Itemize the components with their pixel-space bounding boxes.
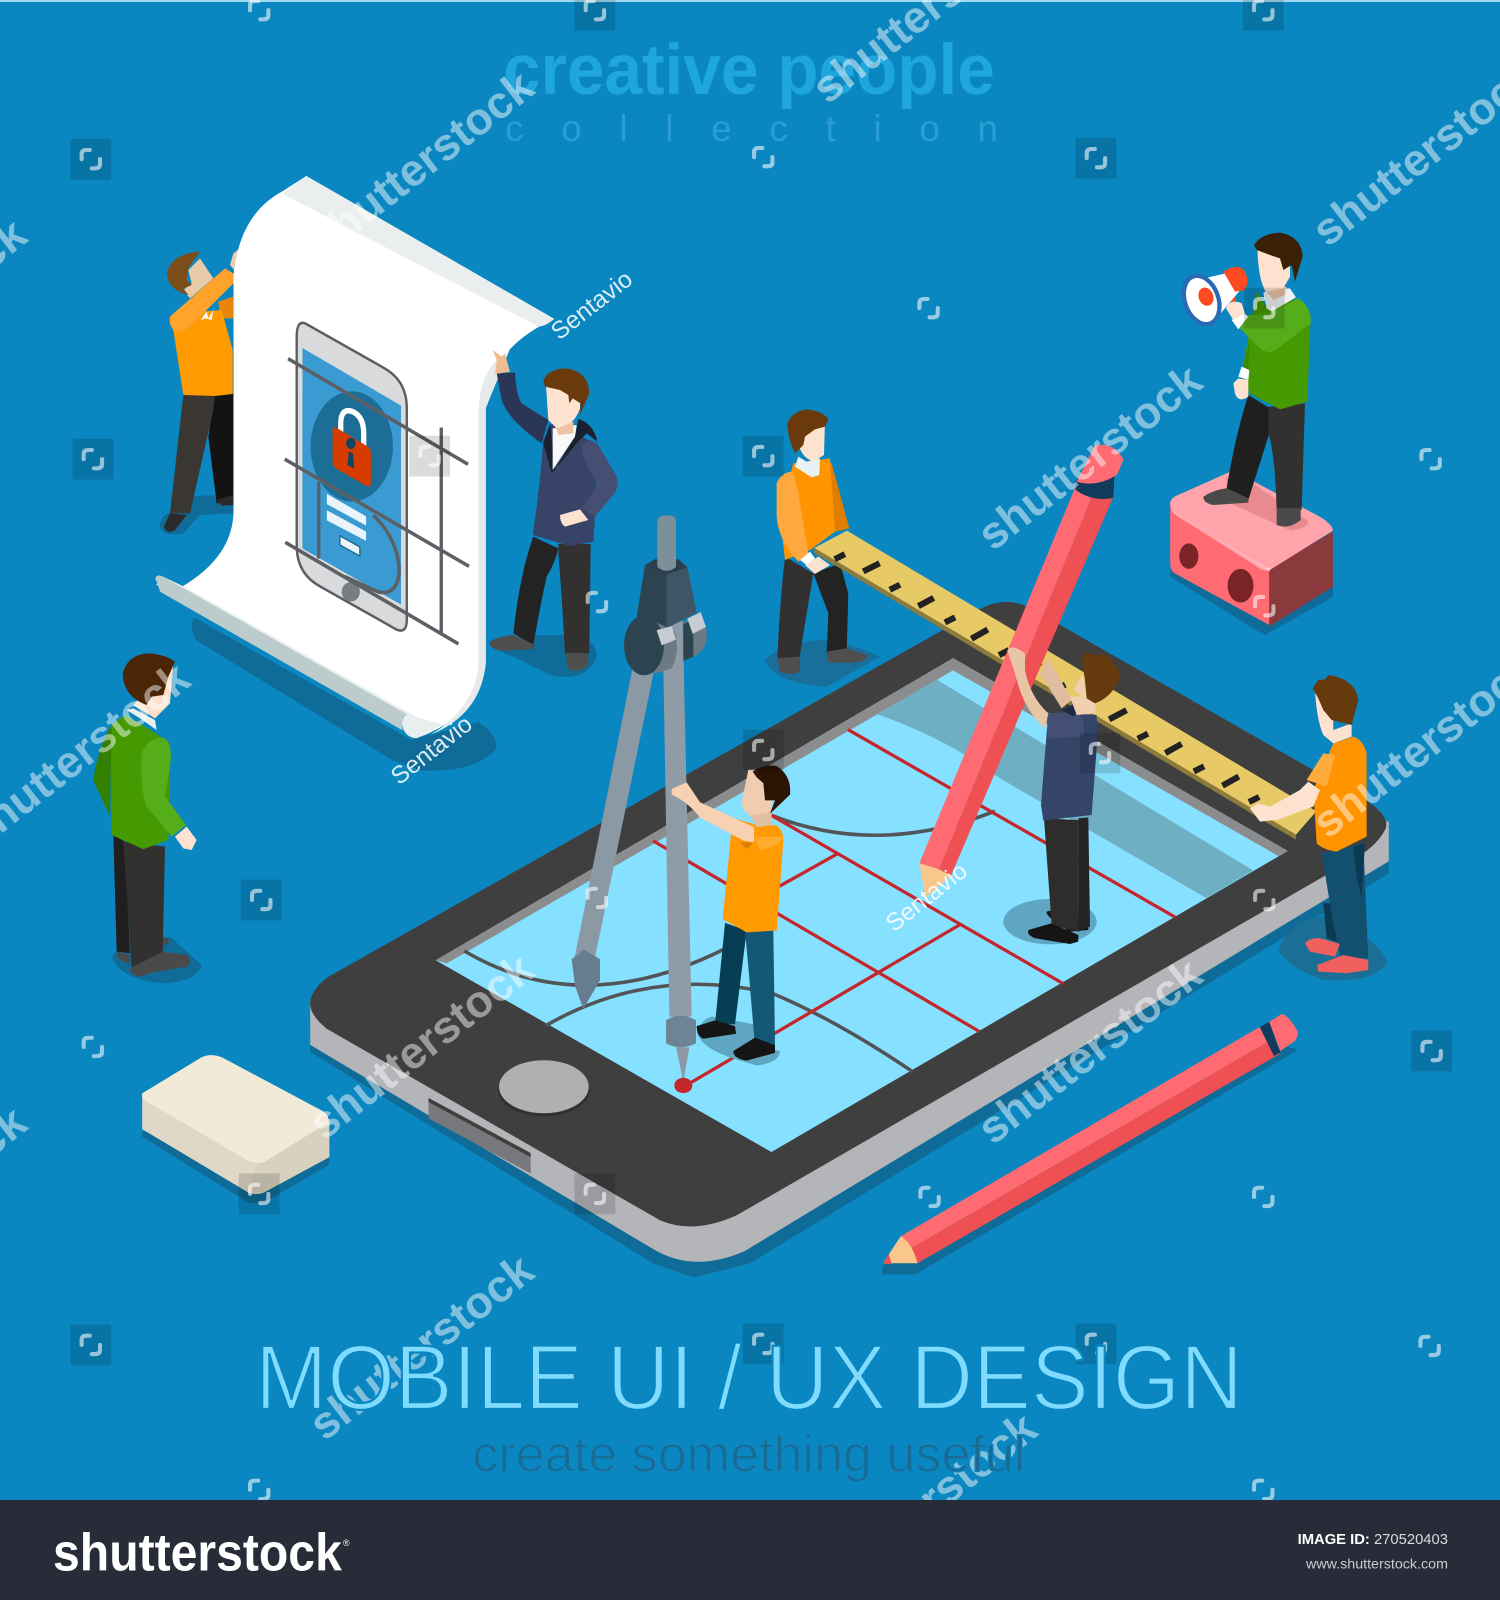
watermark text: shutterstock xyxy=(299,1244,543,1450)
watermark text: shutterstock xyxy=(299,60,543,266)
watermark text: shutterstock xyxy=(968,948,1211,1154)
heading: creative people collection: collection xyxy=(505,108,998,149)
phone screen xyxy=(436,658,1288,1152)
watermark text: shutterstock xyxy=(299,943,543,1149)
person: orange shirt behind paper xyxy=(159,247,251,535)
bottom bar: ® xyxy=(343,1538,350,1548)
bottom bar: shutterstock xyxy=(53,1523,342,1582)
author credit: Sentavio xyxy=(881,857,973,937)
phone top surface xyxy=(310,602,1386,1226)
person: orange shirt holding ruler end xyxy=(1250,675,1387,980)
sharpener block xyxy=(1170,470,1333,635)
home button xyxy=(498,1060,590,1116)
heading: creative people collection xyxy=(503,30,998,149)
person: navy shirt holding pencil xyxy=(1003,647,1120,944)
megaphone xyxy=(1177,267,1247,329)
bottom bar: IMAGE ID: 270520403 xyxy=(1298,1532,1448,1548)
pencil on the table xyxy=(882,1014,1298,1274)
person: navy jacket holding paper xyxy=(488,350,618,677)
heading: creative people collection: creative people xyxy=(503,30,995,110)
author credit: Sentavio xyxy=(546,266,638,346)
author credit: Sentavio xyxy=(386,711,478,790)
big pencil held upright xyxy=(919,445,1123,898)
person: orange shirt with compass xyxy=(672,766,790,1066)
person: orange sweater holding ruler xyxy=(765,409,880,687)
paper scroll with phone wireframe xyxy=(156,176,554,771)
ruler xyxy=(814,531,1316,840)
person with megaphone xyxy=(1177,233,1311,527)
bottom bar xyxy=(0,1500,1500,1600)
grid and sketch lines xyxy=(464,730,1176,1090)
author credit xyxy=(386,266,973,937)
main title: MOBILE UI / UX DESIGN xyxy=(255,1327,1243,1429)
phone body xyxy=(310,602,1389,1278)
person: green sweater standing left xyxy=(93,653,202,983)
subtitle: create something useful xyxy=(472,1425,1026,1482)
compass tool xyxy=(572,515,790,1093)
bottom bar: www.shutterstock.com xyxy=(1305,1556,1448,1572)
phone on paper xyxy=(285,323,469,644)
watermark text: shutterstock xyxy=(968,354,1211,560)
eraser xyxy=(142,1055,329,1203)
speaker slot xyxy=(429,1098,531,1173)
people at right of the phone xyxy=(1003,647,1387,980)
phone shadow xyxy=(310,847,1389,1278)
phone side xyxy=(310,821,1389,1262)
